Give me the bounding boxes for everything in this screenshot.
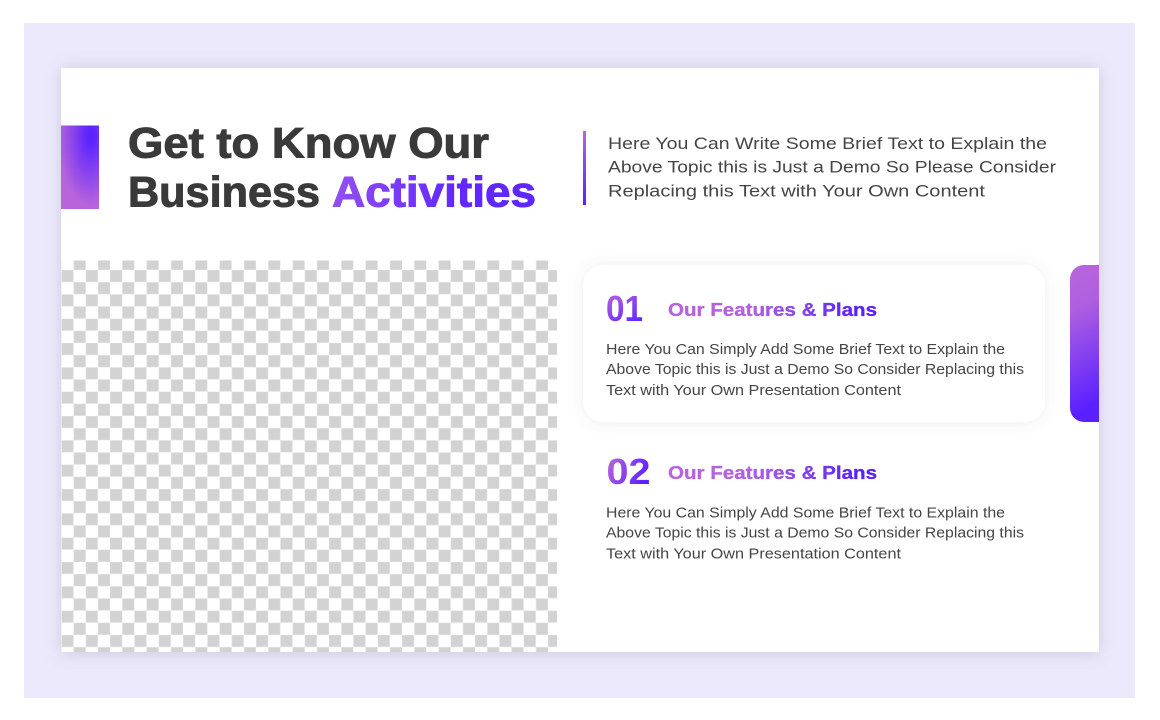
number 01: 01 <box>606 288 643 329</box>
title: Activities <box>332 168 536 216</box>
white slide panel <box>61 68 1099 652</box>
intro text block <box>608 134 1056 200</box>
feature 01 description: Above Topic this is Just a Demo So Consider Replacing this <box>606 362 1024 378</box>
title: Get to Know Our <box>128 120 489 168</box>
feature 02 heading: Our Features & Plans <box>668 463 877 483</box>
accent gradient block <box>61 126 99 209</box>
feature 02 description: Here You Can Simply Add Some Brief Text to Explain the <box>606 506 1005 522</box>
feature 02 description <box>606 506 1024 562</box>
intro text block: Replacing this Text with Your Own Content <box>608 182 985 200</box>
panel: feature 02 <box>606 451 1024 562</box>
feature 01 heading: Our Features & Plans <box>668 300 877 320</box>
feature 02 description: Above Topic this is Just a Demo So Consider Replacing this <box>606 526 1024 542</box>
title <box>128 120 536 216</box>
title: Business <box>128 168 320 216</box>
panel: feature 01 <box>583 265 1045 422</box>
intro text block: Above Topic this is Just a Demo So Please Consider <box>608 158 1056 176</box>
image placeholder checkerboard <box>61 260 557 652</box>
feature card 01 shadow <box>583 265 1045 423</box>
feature 02 description: Text with Your Own Presentation Content <box>606 546 901 562</box>
intro text block: Here You Can Write Some Brief Text to Explain the <box>608 134 1047 153</box>
number 02: 02 <box>606 451 650 492</box>
right gradient tab <box>1070 265 1099 422</box>
feature 01 description <box>606 342 1024 399</box>
feature 01 description: Text with Your Own Presentation Content <box>606 383 901 399</box>
slide card shadow <box>61 68 1099 654</box>
feature 01 description: Here You Can Simply Add Some Brief Text to Explain the <box>606 342 1005 358</box>
header divider line <box>583 131 586 205</box>
